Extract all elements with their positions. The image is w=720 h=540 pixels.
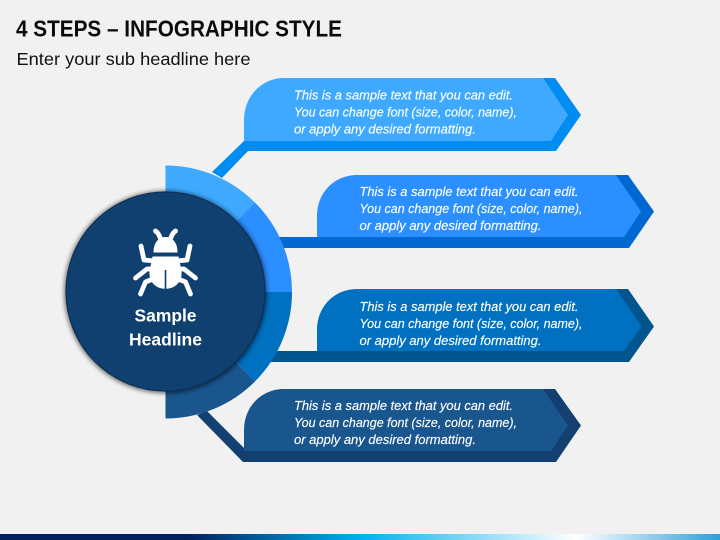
circle label: Headline	[129, 330, 202, 350]
circle disc	[66, 192, 265, 391]
text: step 1: or apply any desired formatting.	[294, 122, 476, 136]
callout body: step 1	[244, 78, 568, 141]
text: step 4: or apply any desired formatting.	[294, 432, 476, 447]
connector and arrow backing: step 2	[240, 175, 654, 248]
text: step 4: You can change font (size, color, name),	[294, 415, 517, 430]
beetle legs and antennae	[136, 231, 196, 294]
center circle	[64, 190, 267, 394]
panel: step 1 callout	[212, 78, 581, 178]
circle shadow	[64, 190, 267, 394]
text: step 3: You can change font (size, color, name),	[360, 316, 582, 331]
text: step 3	[360, 299, 582, 348]
title: 4 STEPS – INFOGRAPHIC STYLE	[16, 16, 342, 42]
panel: step 3 callout	[240, 289, 654, 362]
panel: step 2 callout	[240, 175, 654, 248]
sub headline: Enter your sub headline here	[16, 49, 250, 69]
beetle head	[154, 237, 178, 252]
ring segment 3	[166, 292, 292, 381]
text: step 2	[360, 184, 582, 233]
callout body: step 2	[317, 175, 641, 237]
callout body: step 4	[244, 389, 568, 451]
text: step 1: This is a sample text that you can edit.	[294, 88, 513, 102]
text: step 2: You can change font (size, color, name),	[360, 201, 582, 216]
text: step 4	[294, 398, 517, 447]
icon: beetle	[136, 231, 196, 294]
text: step 1	[294, 88, 517, 136]
text: step 2: or apply any desired formatting.	[360, 218, 542, 233]
text: step 2: This is a sample text that you can edit.	[360, 184, 578, 199]
connector and arrow backing: step 1	[212, 78, 581, 178]
ring segment 2	[166, 203, 292, 292]
callout body: step 3	[317, 289, 642, 351]
segmented ring	[166, 166, 292, 418]
beetle body	[149, 256, 182, 289]
ring segment 1	[166, 166, 255, 292]
connector and arrow backing: step 3	[240, 289, 654, 362]
circle label	[129, 306, 202, 350]
footer gradient bar	[0, 534, 720, 540]
text: step 3: or apply any desired formatting.	[360, 333, 542, 348]
text: step 4: This is a sample text that you can edit.	[294, 398, 513, 413]
connector and arrow backing: step 4	[197, 389, 581, 462]
ring segment 4	[166, 292, 255, 418]
text: step 3: This is a sample text that you can edit.	[360, 299, 578, 314]
panel: step 4 callout	[197, 389, 581, 462]
text: step 1: You can change font (size, color, name),	[294, 104, 517, 120]
circle label: Sample	[134, 306, 197, 326]
